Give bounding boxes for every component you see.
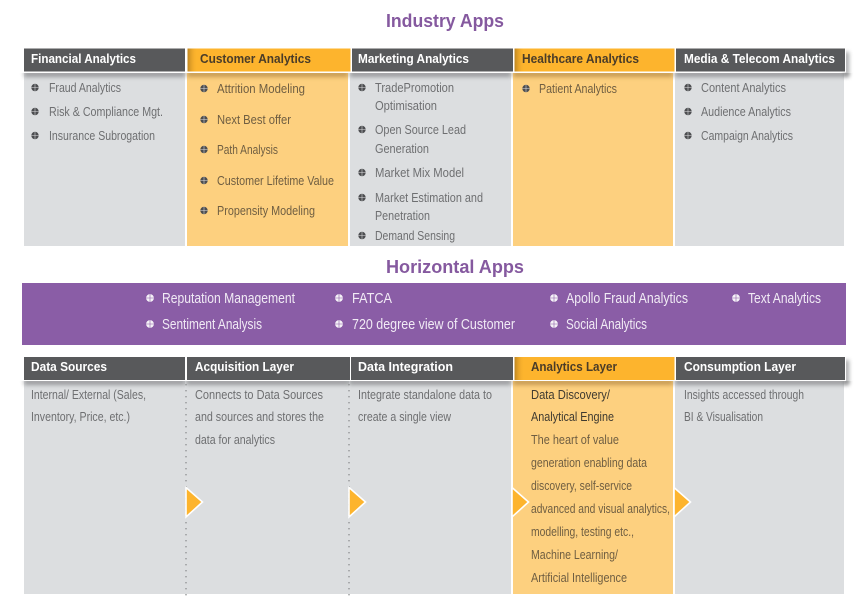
list: customer items	[200, 81, 334, 218]
title: Horizontal Apps: Horizontal Apps	[386, 257, 524, 277]
panel: Data Integration	[349, 356, 514, 594]
arrow: sources to acquisition	[186, 488, 202, 517]
header: Healthcare Analytics	[514, 48, 675, 72]
panel: Horizontal Apps band: 720 degree view of Customer	[352, 316, 515, 333]
list: marketing items: Open Source Lead	[375, 122, 466, 137]
list: financial items	[31, 80, 163, 143]
text: data sources description: Inventory, Price, etc.)	[31, 409, 130, 424]
arrow: analytics to consumption	[674, 488, 690, 517]
text: analytics description: Machine Learning/	[531, 547, 618, 562]
list: media items: Audience Analytics	[701, 104, 791, 119]
panel: Horizontal Apps band: Text Analytics	[748, 290, 821, 307]
panel: Customer Analytics	[187, 48, 351, 246]
panel: Marketing Analytics	[350, 48, 514, 246]
text: consumption description: Insights accessed through	[684, 387, 804, 402]
panel: Media & Telecom Analytics	[675, 48, 849, 246]
header: Data Sources	[24, 356, 186, 380]
text: analytics description: generation enabling data	[531, 455, 648, 470]
text: acquisition description: and sources and stores the	[195, 409, 324, 424]
list: customer items: Propensity Modeling	[217, 203, 315, 218]
list: healthcare items	[522, 81, 617, 96]
list: financial items: Risk & Compliance Mgt.	[49, 104, 163, 119]
header: Customer Analytics	[187, 48, 351, 72]
text: integration description: Integrate standalone data to	[358, 387, 492, 402]
panel: Financial Analytics	[24, 48, 186, 246]
panel: Horizontal Apps band	[22, 283, 846, 345]
panel: Data Sources	[24, 356, 186, 594]
list: marketing items: Market Estimation and	[375, 190, 483, 205]
panel: Healthcare Analytics	[513, 48, 675, 246]
panel: Horizontal Apps band: Apollo Fraud Analytics	[566, 290, 688, 307]
list: media items	[684, 80, 793, 143]
list: marketing items	[358, 80, 483, 243]
title: Industry Apps: Industry Apps	[386, 11, 504, 31]
header: Media & Telecom Analytics	[676, 48, 846, 72]
header: Financial Analytics: Financial Analytics	[31, 51, 136, 66]
text: data sources description: Internal/ External (Sales,	[31, 387, 146, 402]
section: data pipeline columns	[24, 356, 849, 596]
panel: Consumption Layer	[675, 356, 849, 594]
list: marketing items: Optimisation	[375, 98, 437, 113]
text: analytics description: advanced and visual analytics,	[531, 501, 670, 516]
header: Acquisition Layer	[186, 356, 350, 380]
panel: Horizontal Apps band: Social Analytics	[566, 316, 647, 333]
text: consumption description: BI & Visualisation	[684, 409, 763, 424]
list: financial items: Insurance Subrogation	[49, 128, 155, 143]
list: media items: Content Analytics	[701, 80, 786, 95]
list: customer items: Attrition Modeling	[217, 81, 305, 96]
list: customer items: Customer Lifetime Value	[217, 173, 334, 188]
header: Analytics Layer: Analytics Layer	[531, 359, 617, 374]
list: marketing items: Market Mix Model	[375, 165, 464, 180]
text: integration description: create a single view	[358, 409, 451, 424]
header: Customer Analytics: Customer Analytics	[200, 51, 311, 66]
panel: Acquisition Layer	[185, 356, 350, 594]
list: financial items: Fraud Analytics	[49, 80, 121, 95]
text: analytics description: The heart of value	[531, 432, 619, 447]
list: marketing items: Penetration	[375, 208, 430, 223]
text: analytics description	[531, 387, 670, 585]
header: Analytics Layer	[514, 356, 675, 380]
list: healthcare items: Patient Analytics	[539, 81, 617, 96]
list: customer items: Next Best offer	[217, 112, 292, 127]
text: acquisition description: Connects to Data Sources	[195, 387, 323, 402]
arrow: integration to analytics	[512, 488, 528, 517]
panel: Horizontal Apps band: Sentiment Analysis	[162, 316, 262, 333]
header: Consumption Layer	[676, 356, 846, 380]
text: integration description	[358, 387, 492, 424]
list: media items: Campaign Analytics	[701, 128, 793, 143]
list: marketing items: Generation	[375, 141, 429, 156]
header: Marketing Analytics	[352, 48, 514, 72]
header: Marketing Analytics: Marketing Analytics	[358, 51, 469, 66]
header: Acquisition Layer: Acquisition Layer	[195, 359, 294, 374]
panel: Horizontal Apps band: Reputation Management	[162, 290, 296, 307]
panel: Horizontal Apps band: FATCA	[352, 290, 392, 307]
section: industry apps columns	[24, 48, 849, 246]
text: analytics description: Artificial Intelligence	[531, 570, 627, 585]
header: Healthcare Analytics: Healthcare Analytics	[522, 51, 639, 66]
header: Financial Analytics	[24, 48, 186, 72]
text: analytics description: Data Discovery/	[531, 387, 610, 402]
panel: Analytics Layer	[513, 356, 675, 594]
text: analytics description: Analytical Engine	[531, 409, 614, 424]
text: consumption description	[684, 387, 804, 424]
text: data sources description	[31, 387, 146, 424]
text: acquisition description: data for analytics	[195, 432, 275, 447]
text: analytics description: modelling, testing etc.,	[531, 524, 634, 539]
list: customer items: Path Analysis	[217, 142, 278, 157]
list: marketing items: Demand Sensing	[375, 228, 455, 243]
arrow: acquisition to integration	[349, 488, 366, 517]
text: acquisition description	[195, 387, 324, 447]
header: Media & Telecom Analytics: Media & Telecom Analytics	[684, 51, 835, 66]
text: analytics description: discovery, self-service	[531, 478, 632, 493]
list: marketing items: TradePromotion	[375, 80, 454, 95]
header: Consumption Layer: Consumption Layer	[684, 359, 796, 374]
header: Data Integration: Data Integration	[358, 359, 453, 374]
header: Data Sources: Data Sources	[31, 359, 107, 374]
header: Data Integration	[350, 356, 514, 380]
